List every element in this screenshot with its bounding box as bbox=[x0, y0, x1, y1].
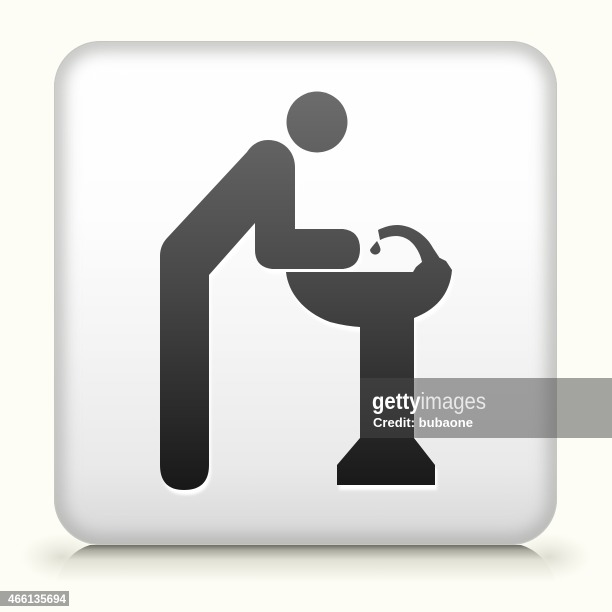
watermark credit: Credit: bubaone bbox=[373, 416, 473, 430]
sink bowl and pedestal bbox=[286, 258, 452, 485]
image id tag: 466135694 bbox=[8, 594, 67, 606]
person head bbox=[286, 92, 348, 152]
faucet bbox=[378, 225, 441, 262]
card reflection and shadow bbox=[20, 533, 591, 582]
water drop bbox=[370, 241, 380, 255]
icon: person washing at sink bbox=[160, 92, 454, 495]
person body, arm and leg bbox=[160, 140, 360, 490]
icon highlight edge bbox=[162, 145, 454, 495]
watermark logo: gettyimages bbox=[372, 388, 486, 414]
watermark band bbox=[360, 378, 612, 438]
white rounded square button bbox=[54, 41, 557, 545]
image id tag bbox=[0, 591, 69, 606]
